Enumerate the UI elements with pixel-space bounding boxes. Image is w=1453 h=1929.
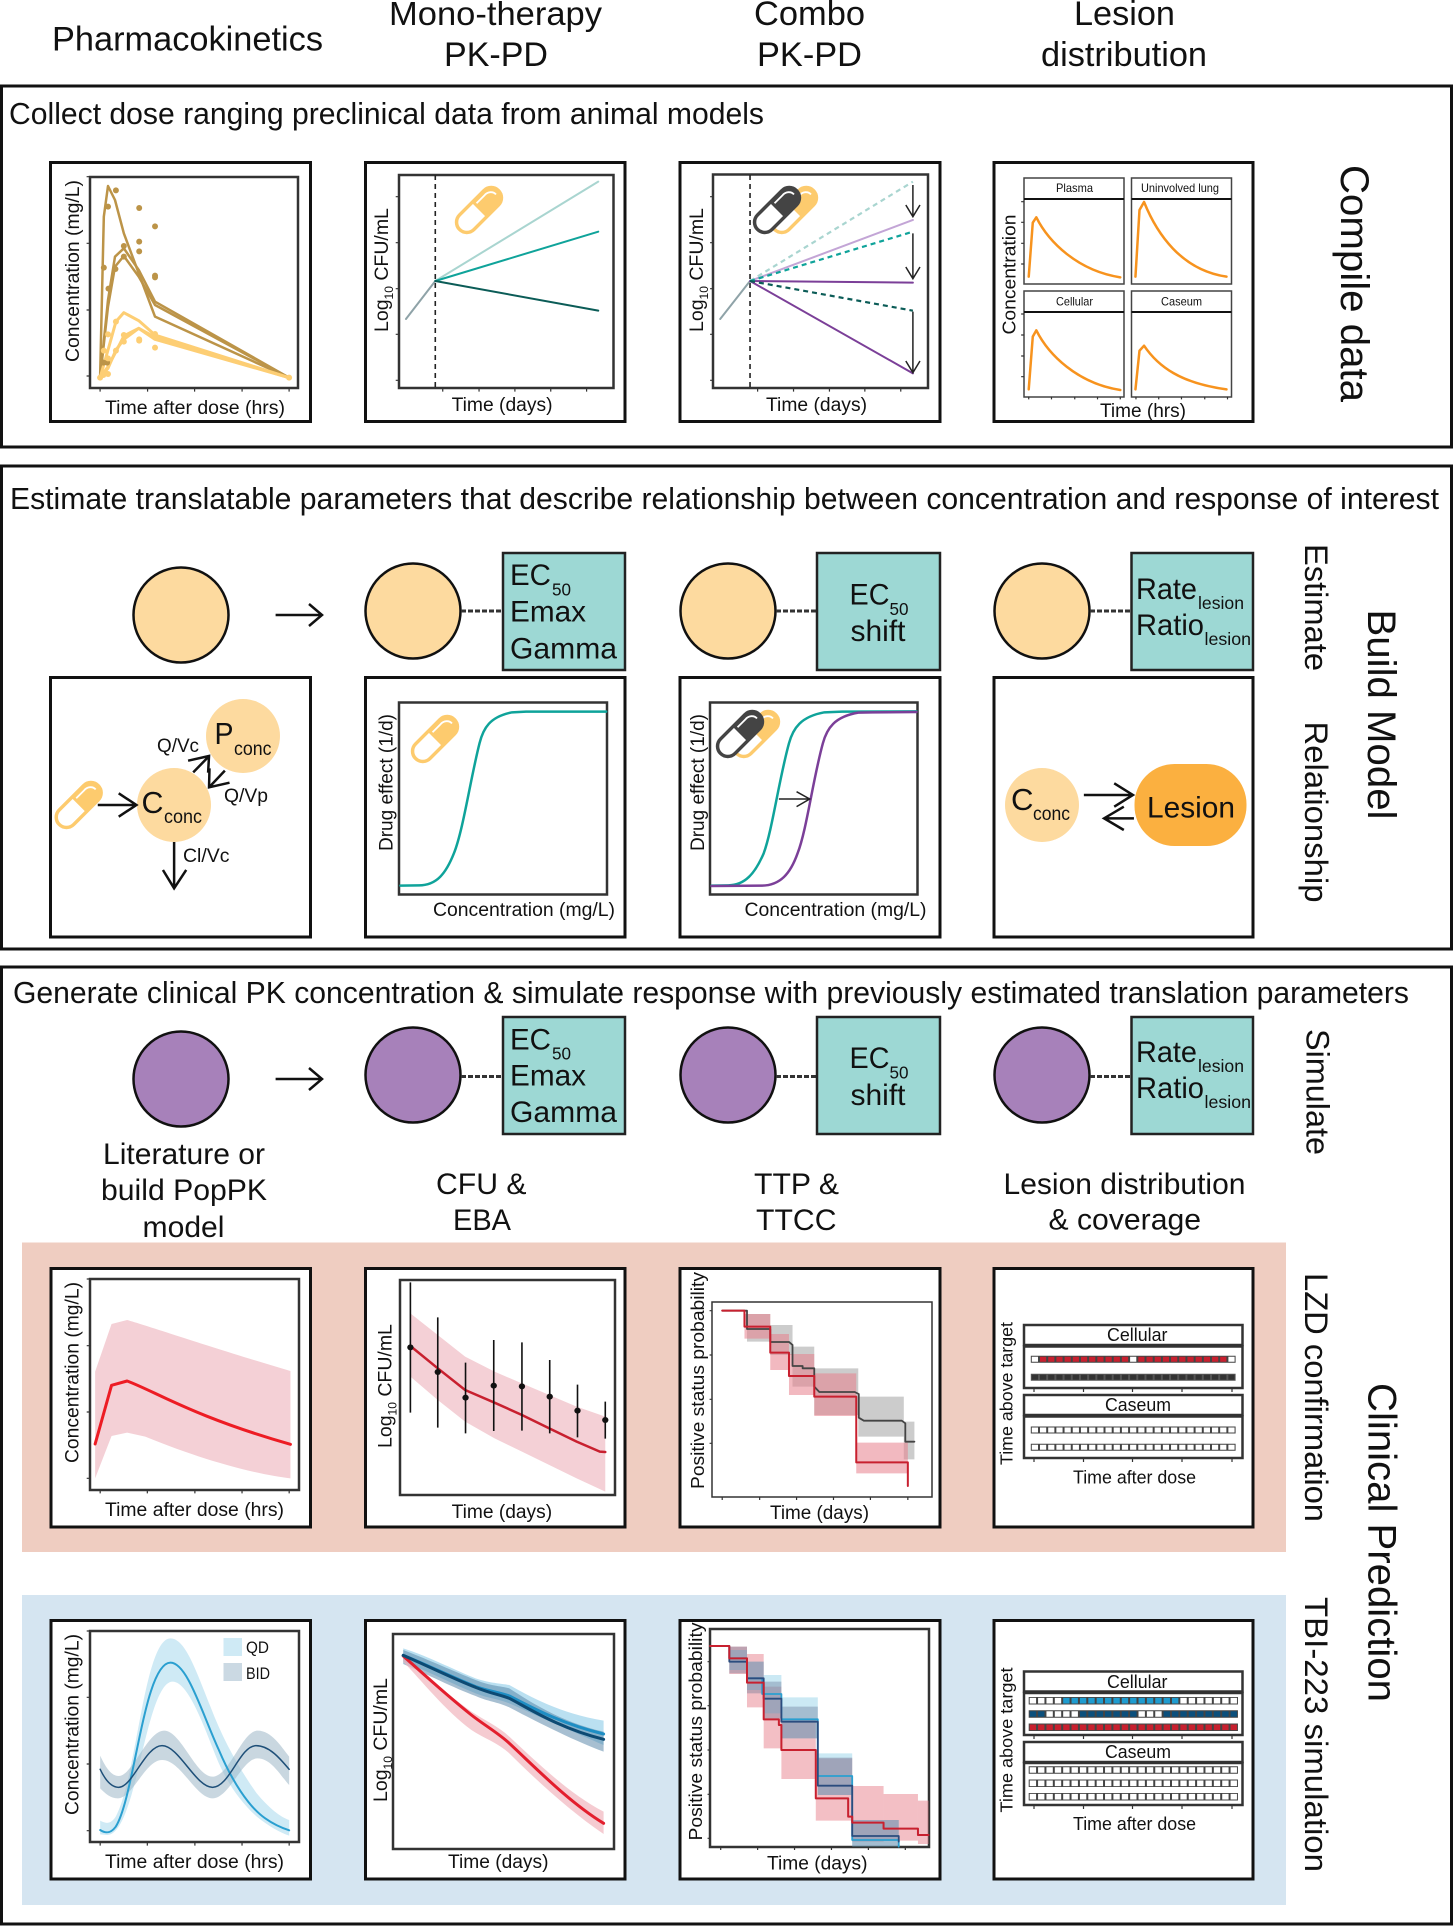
chart: LZD lesion coverage: Cellular	[1107, 1324, 1168, 1345]
clinical node: lesion: lesion	[1204, 1092, 1251, 1112]
chart: combination CFU time course: 10	[697, 286, 711, 299]
side label: estimate: Estimate	[1298, 544, 1334, 671]
chart: mono-therapy CFU time course	[366, 162, 625, 422]
heading: Mono-therapy PK-PD: PK-PD	[444, 36, 548, 74]
chart: LZD CFU: Log	[374, 1415, 396, 1448]
chart: TBI-223 lesion coverage: Time after dose	[1073, 1814, 1196, 1834]
side label: relationship: Relationship	[1298, 722, 1334, 902]
chart: TBI-223 lesion coverage: Time above target	[996, 1667, 1016, 1812]
chart: Emax sigmoid: Concentration (mg/L)	[433, 900, 615, 921]
heading: Lesion distribution: distribution	[1041, 36, 1207, 74]
tiles: caseum coverage rows	[1031, 1430, 1236, 1447]
chart: TBI-223 CFU: Time (days)	[448, 1852, 548, 1873]
clinical node: combination: EC	[850, 1042, 890, 1075]
parameter node: lesion: Ratio	[1136, 609, 1204, 642]
chart: TBI-223 CFU: CFU/mL	[370, 1678, 392, 1756]
column label: TTP and TTCC: TTP &	[754, 1168, 839, 1201]
heading: Pharmacokinetics: Pharmacokinetics	[52, 20, 323, 58]
parameter node: mono-therapy: Emax	[510, 596, 586, 628]
chart: combination CFU time course: CFU/mL	[686, 208, 708, 286]
chart: TBI-223 time to positivity: Time (days)	[767, 1854, 868, 1874]
tiles: cellular coverage rows	[1031, 1359, 1236, 1377]
chart: Emax sigmoid	[366, 678, 625, 937]
diagram: compartment model: conc	[164, 807, 202, 828]
chart: mono-therapy CFU time course: CFU/mL	[371, 208, 393, 286]
side label: TBI-223 simulation: TBI-223 simulation	[1298, 1597, 1334, 1872]
chart: preclinical pharmacokinetics: Time after dose (hrs)	[105, 398, 285, 419]
band: TBI-223 simulation	[22, 1595, 1286, 1905]
chart: TBI-223 lesion coverage: Caseum	[1105, 1741, 1171, 1762]
side label: simulate: Simulate	[1300, 1029, 1336, 1155]
chart: LZD lesion coverage: Caseum	[1105, 1394, 1171, 1415]
clinical node: mono-therapy	[366, 1017, 625, 1134]
side label: compile data: Compile data	[1332, 165, 1376, 402]
column label: CFU and EBA: CFU &	[436, 1168, 526, 1201]
chart: combination CFU time course: Log	[686, 299, 708, 332]
parameter node: combination	[680, 553, 940, 670]
side label: clinical prediction: Clinical Prediction	[1360, 1383, 1404, 1702]
clinical node: lesion	[994, 1017, 1253, 1134]
clinical node: lesion: Ratio	[1136, 1072, 1204, 1105]
tiles: cellular coverage rows	[1029, 1701, 1238, 1727]
chart: LZD concentration	[51, 1268, 310, 1527]
diagram: compartment model: P	[214, 716, 234, 751]
clinical node: lesion: Rate	[1136, 1036, 1197, 1069]
parameter node: mono-therapy: EC	[510, 559, 551, 592]
diagram: plasma to lesion exchange: conc	[1033, 804, 1070, 825]
panel title: collect data: Collect dose ranging preclinical data from animal models	[9, 96, 764, 131]
chart: LZD CFU: 10	[386, 1402, 400, 1415]
parameter node: mono-therapy: 50	[552, 580, 571, 600]
parameter node: lesion	[994, 553, 1253, 670]
icon: combination pills	[713, 707, 783, 761]
arrow: clinical PK to PD	[276, 1068, 322, 1090]
chart: LZD lesion coverage	[994, 1268, 1253, 1527]
heading: Combo PK-PD	[754, 0, 865, 74]
chart: EC50 shift sigmoids	[680, 678, 940, 937]
chart: mono-therapy CFU time course: Time (days)	[452, 395, 553, 416]
parameter node: combination: 50	[890, 599, 909, 619]
diagram: compartment model	[50, 678, 310, 937]
chart: TBI-223 concentration	[51, 1620, 310, 1879]
column label: TTP and TTCC: TTCC	[756, 1204, 836, 1237]
diagram: plasma to lesion exchange: C	[1011, 782, 1034, 817]
clinical node: mono-therapy: Emax	[510, 1060, 586, 1092]
column label: lesion distribution and coverage	[1004, 1168, 1246, 1236]
clinical node: PK circle	[134, 1032, 228, 1126]
parameter node: mono-therapy: Gamma	[510, 632, 617, 666]
clinical node: combination: 50	[890, 1062, 909, 1082]
diagram: compartment model: conc	[234, 739, 272, 760]
column label: literature or PopPK: model	[142, 1211, 224, 1244]
chart: mono-therapy CFU time course: Log	[371, 299, 393, 332]
chart: preclinical pharmacokinetics: Concentration (mg/L)	[63, 180, 84, 362]
side label: build model: Build Model	[1359, 610, 1403, 819]
legend: QD and BID: BID	[246, 1664, 270, 1683]
panel: build model	[2, 466, 1452, 949]
chart: LZD time to positivity	[680, 1268, 940, 1527]
chart: preclinical pharmacokinetics	[50, 162, 310, 422]
legend: QD and BID: QD	[246, 1638, 269, 1657]
chart: lesion concentration facets: Time (hrs)	[1100, 401, 1186, 422]
diagram: compartment model: C	[142, 785, 164, 820]
chart: lesion concentration facets	[994, 162, 1253, 422]
parameter node: combination: EC	[850, 578, 890, 612]
diagram: compartment model: Cl/Vc	[183, 846, 230, 867]
icon: pill	[452, 183, 506, 237]
heading: Combo PK-PD: PK-PD	[757, 36, 862, 74]
chart: TBI-223 concentration: Time after dose (hrs)	[105, 1852, 284, 1873]
chart: TBI-223 CFU: Log	[370, 1769, 392, 1802]
column label: literature or PopPK: build PopPK	[101, 1174, 267, 1207]
column label: lesion distribution and coverage: & coverage	[1048, 1204, 1201, 1236]
chart: EC50 shift sigmoids: Drug effect (1/d)	[688, 714, 709, 851]
chart: LZD time to positivity: Positive status probability	[688, 1272, 708, 1489]
arrows: combination effect	[906, 185, 920, 373]
legend: QD and BID	[224, 1638, 270, 1683]
chart: LZD lesion coverage: Time above target	[996, 1322, 1016, 1465]
chart: TBI-223 time to positivity	[680, 1620, 940, 1879]
diagram: plasma to lesion exchange: Lesion	[1147, 792, 1235, 824]
chart: Emax sigmoid: Drug effect (1/d)	[376, 714, 398, 851]
clinical node: mono-therapy: EC	[510, 1024, 551, 1056]
chart: TBI-223 lesion coverage	[994, 1620, 1253, 1879]
clinical node: combination: shift	[850, 1079, 906, 1112]
clinical node: combination	[680, 1017, 940, 1134]
column label: literature or PopPK: Literature or	[103, 1138, 265, 1171]
chart: LZD CFU: Time (days)	[452, 1502, 552, 1523]
chart: lesion concentration facets: Uninvolved lung	[1141, 181, 1219, 195]
chart: lesion concentration facets: Caseum	[1161, 294, 1202, 308]
chart: EC50 shift sigmoids: Concentration (mg/L)	[744, 900, 926, 921]
heading: Lesion distribution	[1041, 0, 1207, 74]
parameter node: mono-therapy	[366, 553, 625, 670]
parameter node: combination: shift	[850, 615, 906, 648]
parameter node: PK circle	[134, 568, 228, 662]
clinical node: mono-therapy: 50	[552, 1044, 571, 1064]
diagram: compartment model: Q/Vc	[157, 736, 199, 757]
column label: TTP and TTCC	[754, 1168, 839, 1237]
chart: mono-therapy CFU time course: 10	[382, 286, 396, 299]
diagram: compartment model: Q/Vp	[224, 786, 268, 807]
chart: TBI-223 time to positivity: Positive status probability	[686, 1622, 706, 1840]
column label: lesion distribution and coverage: Lesion distribution	[1004, 1168, 1246, 1201]
band: LZD confirmation	[22, 1242, 1286, 1552]
chart: LZD lesion coverage: Time after dose	[1073, 1468, 1196, 1488]
chart: lesion concentration facets: Concentration	[999, 214, 1020, 334]
tiles: caseum coverage rows	[1029, 1770, 1238, 1797]
parameter node: lesion: lesion	[1198, 593, 1244, 613]
chart: TBI-223 CFU	[366, 1620, 625, 1879]
chart: combination CFU time course: Time (days)	[766, 395, 867, 416]
column label: CFU and EBA: EBA	[453, 1204, 511, 1237]
chart: TBI-223 lesion coverage: Cellular	[1107, 1671, 1168, 1692]
chart: LZD concentration: Time after dose (hrs)	[105, 1500, 284, 1521]
panel title: generate clinical PK: Generate clinical PK concentration & simulate response with previously estimated translation parameters	[13, 975, 1409, 1010]
clinical node: lesion: lesion	[1198, 1056, 1244, 1076]
panel: compile data	[2, 86, 1452, 447]
panel title: estimate parameters: Estimate translatable parameters that describe relationship between concentration and response of interest	[10, 481, 1439, 516]
diagram: plasma to lesion exchange	[994, 678, 1253, 937]
column label: literature or PopPK	[101, 1138, 267, 1244]
chart: LZD CFU: CFU/mL	[374, 1324, 396, 1402]
parameter node: lesion: lesion	[1204, 629, 1251, 649]
icon: dosing pill	[52, 778, 105, 832]
icon: pill	[408, 712, 462, 766]
side label: LZD confirmation: LZD confirmation	[1298, 1273, 1334, 1522]
arrow: PK to PD	[276, 604, 322, 626]
chart: lesion concentration facets: Plasma	[1056, 181, 1093, 195]
chart: TBI-223 concentration: Concentration (mg/L)	[63, 1634, 84, 1815]
chart: combination CFU time course	[680, 162, 940, 422]
column label: CFU and EBA	[436, 1168, 526, 1237]
chart: TBI-223 CFU: 10	[381, 1756, 395, 1769]
icon: combination pills	[750, 183, 821, 237]
panel: clinical prediction	[2, 967, 1452, 1924]
chart: LZD time to positivity: Time (days)	[770, 1503, 869, 1524]
column headings	[52, 0, 1207, 74]
clinical node: mono-therapy: Gamma	[510, 1096, 617, 1129]
heading: Mono-therapy PK-PD	[389, 0, 603, 74]
parameter node: lesion: Rate	[1136, 573, 1197, 606]
chart: LZD CFU	[366, 1268, 625, 1527]
chart: lesion concentration facets: Cellular	[1056, 294, 1093, 308]
chart: LZD concentration: Concentration (mg/L)	[63, 1282, 84, 1463]
